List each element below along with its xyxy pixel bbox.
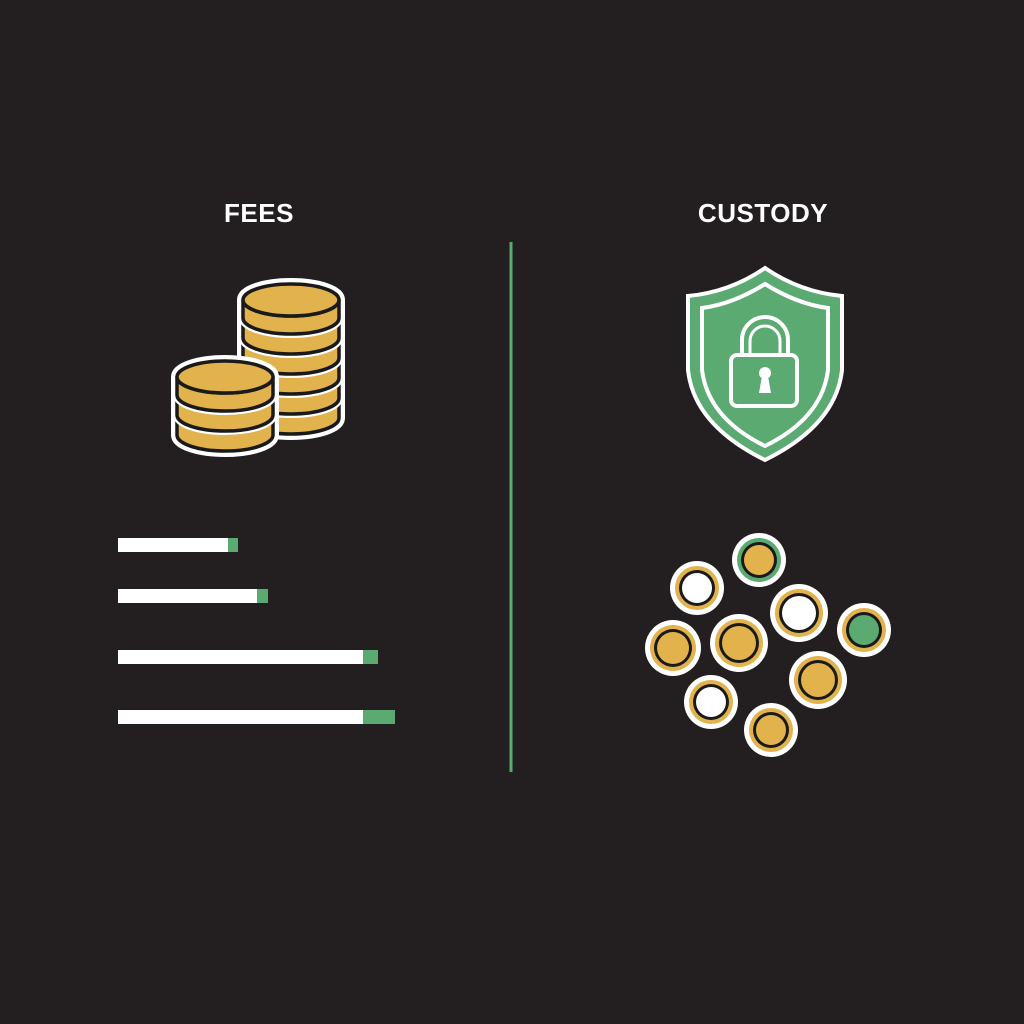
title: fees: FEES — [224, 198, 294, 228]
icon: shield with lock — [688, 268, 842, 460]
title: custody: CUSTODY — [698, 198, 828, 228]
left stack — [177, 361, 273, 451]
right stack — [243, 284, 339, 434]
bar chart — [118, 538, 395, 724]
icon: coin stacks — [177, 284, 339, 451]
coin cluster — [645, 533, 891, 757]
divider — [510, 242, 512, 772]
